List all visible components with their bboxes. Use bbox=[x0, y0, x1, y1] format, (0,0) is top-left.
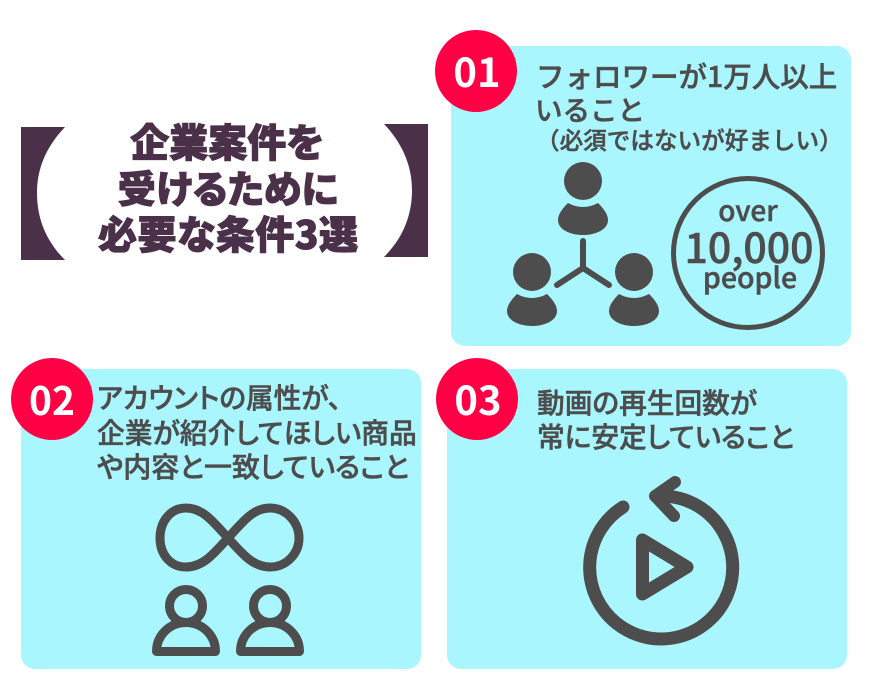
badge 01 bbox=[435, 30, 517, 112]
right bracket bbox=[384, 124, 428, 257]
over 10,000 people badge: over bbox=[718, 190, 778, 230]
over 10,000 people badge: people bbox=[703, 256, 797, 297]
over 10,000 people badge: 10,000 bbox=[684, 215, 814, 275]
title text bbox=[98, 113, 358, 261]
icon: two people outline bbox=[156, 590, 300, 652]
badge 03 bbox=[436, 358, 518, 440]
panel 02 text: アカウントの属性が、 bbox=[97, 376, 342, 416]
title text: 必要な条件3選 bbox=[98, 205, 358, 261]
panel 02: audience fit bbox=[11, 358, 421, 669]
panel 03 text bbox=[537, 381, 794, 455]
panel 01 text: いること bbox=[535, 88, 645, 128]
badge 01: 01 bbox=[453, 41, 501, 99]
panel 03 text: 動画の再生回数が bbox=[537, 381, 758, 421]
panel 01 text: （必須ではないが好ましい） bbox=[536, 122, 843, 156]
badge 03: 03 bbox=[454, 369, 502, 427]
panel 02 text: や内容と一致していること bbox=[97, 446, 409, 486]
panel 03: stable views bbox=[436, 358, 847, 669]
panel 01 text: フォロワーが1万人以上 bbox=[536, 55, 837, 96]
title block bbox=[21, 113, 428, 261]
left bracket bbox=[21, 127, 65, 260]
badge 02: 02 bbox=[29, 371, 75, 427]
panel 02 text: 企業が紹介してほしい商品 bbox=[97, 412, 417, 452]
icon: replay play bbox=[590, 482, 733, 639]
panel 03 text: 常に安定していること bbox=[537, 415, 794, 455]
icon: connected people bbox=[507, 162, 659, 326]
panel 02 text bbox=[97, 376, 417, 486]
panel 01 text bbox=[535, 55, 843, 156]
panel 01: followers bbox=[435, 30, 851, 346]
over 10,000 people badge bbox=[674, 178, 822, 328]
panel background bbox=[21, 369, 421, 669]
title text: 企業案件を bbox=[130, 113, 324, 169]
badge 02 bbox=[11, 358, 93, 440]
title text: 受けるために bbox=[118, 159, 338, 214]
icon: infinity bbox=[160, 508, 299, 567]
panel background bbox=[447, 369, 847, 669]
panel background bbox=[451, 46, 851, 346]
